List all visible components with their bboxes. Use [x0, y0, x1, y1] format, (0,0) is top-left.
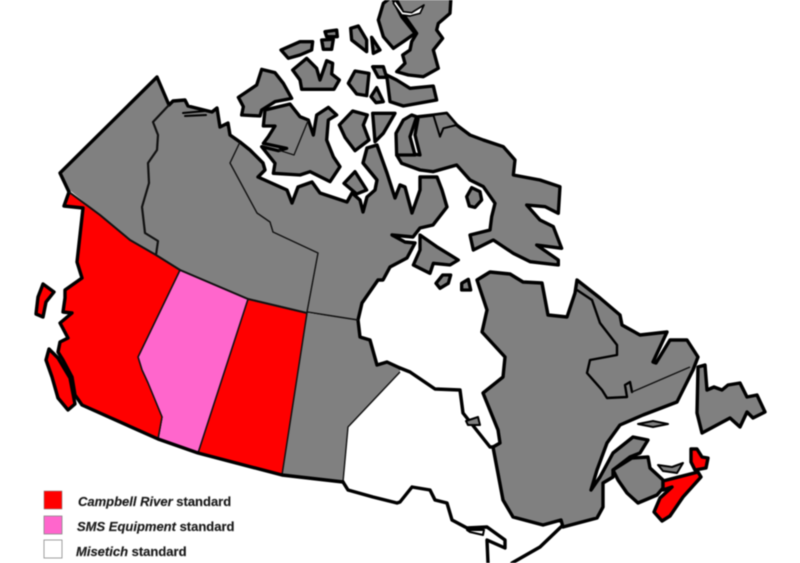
province: Manitoba [282, 313, 400, 482]
island: Amund Ringnes [372, 37, 380, 53]
island: Akimiski [466, 417, 480, 425]
island: Brodeur [396, 115, 417, 155]
province: Northwest Territories [142, 100, 318, 312]
province: Nova Scotia [654, 472, 701, 521]
island: Axel Heiberg [378, 0, 415, 48]
island: Prince Edward Island [658, 463, 683, 473]
island: Cape Breton [691, 449, 708, 470]
island: Mansel [462, 279, 471, 290]
legend [44, 491, 235, 559]
island: Prince Patrick [281, 42, 313, 58]
province outline: Ontario [400, 368, 493, 447]
island: Baffin [397, 113, 562, 265]
island: Southampton [413, 235, 458, 273]
island: Prince Charles [467, 188, 482, 207]
island: Melville [293, 58, 339, 89]
island: Haida Gwaii [36, 284, 54, 317]
province: Alberta [138, 270, 248, 453]
island: Devon [387, 75, 437, 106]
fjord sliver [393, 0, 424, 16]
province: Newfoundland [697, 365, 765, 433]
island: Bylot [433, 113, 457, 137]
island: Ellef Ringnes [351, 26, 367, 52]
legend: Campbell River: Campbell River standard [78, 494, 231, 509]
province: Yukon [60, 77, 169, 255]
island: Victoria [262, 104, 340, 182]
legend: Misetich: Misetich standard [76, 544, 187, 559]
island: Manitoulin [467, 530, 484, 535]
province: Quebec and Labrador [477, 272, 698, 527]
island: Vancouver Island [46, 349, 75, 410]
Victoria interior line [278, 120, 308, 155]
island: small north [373, 67, 387, 77]
island: Banks [238, 69, 292, 116]
province: Nunavut mainland [230, 142, 447, 320]
inland borders [230, 142, 358, 320]
island: Bathurst [348, 71, 369, 96]
coastline [58, 192, 343, 482]
province: British Columbia [58, 192, 180, 439]
island: Prince of Wales [339, 111, 369, 151]
island: King William [344, 172, 367, 194]
legend: Misetich [44, 540, 187, 559]
island: Somerset [373, 113, 395, 142]
province: New Brunswick [613, 457, 663, 503]
Quebec-Labrador border [577, 290, 632, 398]
island: Cornwallis [371, 88, 383, 103]
island: Borden [322, 39, 333, 49]
legend: SMS Equipment [44, 516, 235, 534]
legend: Campbell River [44, 491, 231, 509]
Arctic islands [238, 0, 562, 290]
island: Coats [436, 275, 451, 288]
island: Ellesmere [395, 0, 451, 77]
island: Mackenzie King [325, 30, 337, 37]
island: Anticosti [638, 421, 668, 427]
province: Saskatchewan [198, 299, 307, 475]
legend: SMS Equipment: SMS Equipment standard [77, 519, 235, 534]
